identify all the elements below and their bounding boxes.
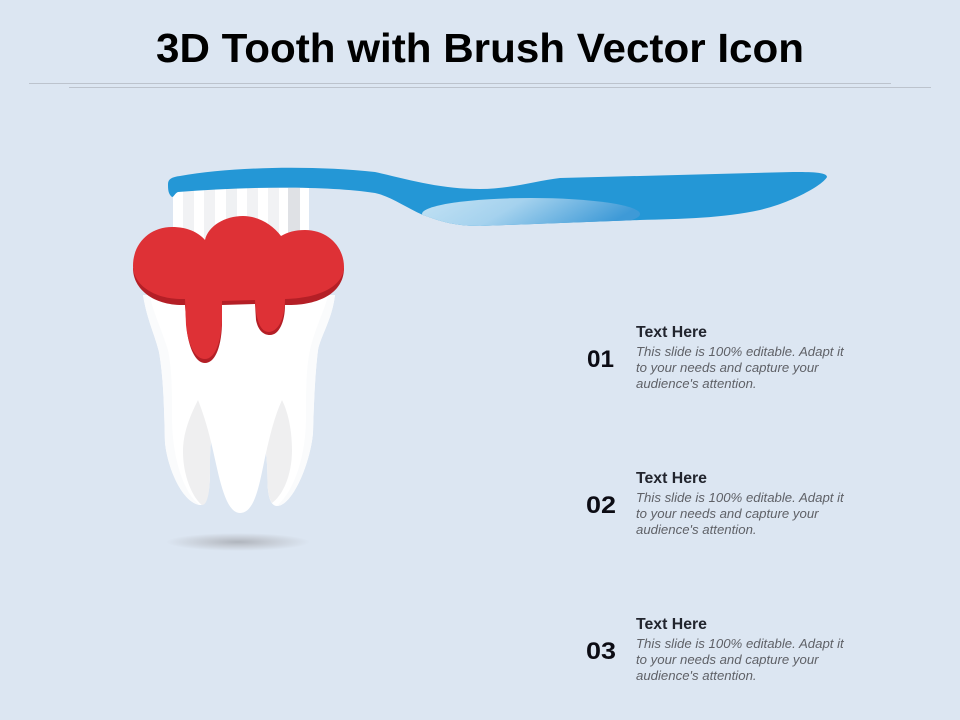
heading 01: Text Here <box>636 324 707 341</box>
bristles <box>173 188 309 240</box>
right root shadow <box>266 400 292 503</box>
description 03: audience's attention. <box>636 668 757 683</box>
tooth shadow <box>166 533 310 551</box>
tooth body <box>143 295 335 513</box>
title rules <box>29 83 931 88</box>
toothbrush handle <box>168 168 827 226</box>
description 02: to your needs and capture your <box>636 506 819 521</box>
number 01: 01 <box>587 346 614 373</box>
tooth side shading left <box>143 295 200 505</box>
paste side shadow <box>133 268 344 363</box>
description 02: audience's attention. <box>636 522 757 537</box>
number 02: 02 <box>586 492 616 519</box>
description 03: to your needs and capture your <box>636 652 819 667</box>
description 01: to your needs and capture your <box>636 360 819 375</box>
title: 3D Tooth with Brush Vector Icon <box>156 25 804 71</box>
tooth side shading right <box>277 295 335 506</box>
description 01: This slide is 100% editable. Adapt it <box>636 344 845 359</box>
left root shadow <box>183 400 211 505</box>
heading 02: Text Here <box>636 470 707 487</box>
description 03: This slide is 100% editable. Adapt it <box>636 636 845 651</box>
toothpaste <box>133 216 344 359</box>
number 03: 03 <box>586 638 616 665</box>
item 03 <box>586 616 845 683</box>
item 02 <box>586 470 845 537</box>
handle highlight <box>422 198 640 226</box>
description 02: This slide is 100% editable. Adapt it <box>636 490 845 505</box>
heading 03: Text Here <box>636 616 707 633</box>
tooth with brush illustration <box>133 168 827 513</box>
description 01: audience's attention. <box>636 376 757 391</box>
item 01 <box>587 324 845 391</box>
